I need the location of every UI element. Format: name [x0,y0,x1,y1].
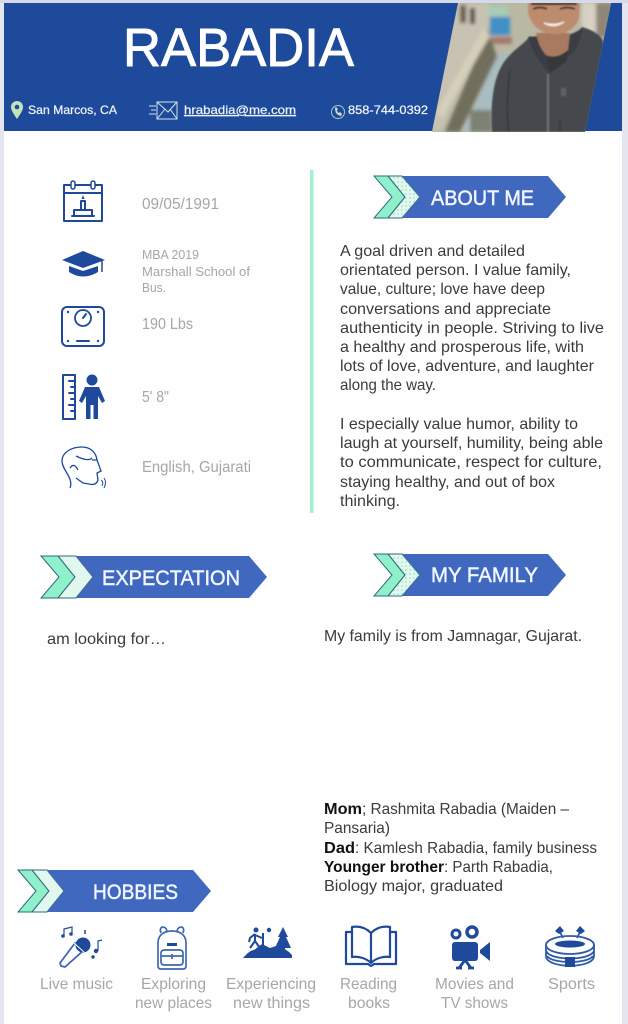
icon: backpack [158,927,186,969]
text block: about me: thinking. [340,493,400,510]
text block: about me: authenticity in people. Striving to live [340,320,604,337]
phone contact [332,103,428,118]
label: exploring new places: new places [135,995,212,1012]
text block: family members [324,801,597,895]
label: movies and tv shows [435,976,514,1012]
text block: about me: conversations and appreciate [340,301,551,318]
education [142,247,250,295]
heading: about me [374,176,566,218]
label: movies and tv shows: Movies and [435,976,514,993]
icon: movie camera [452,927,490,968]
label: reading books [340,976,397,1012]
label: reading books: books [348,995,390,1012]
education: Bus. [142,280,166,295]
text block: family members: ; Rashmita Rabadia (Maiden – [362,801,569,818]
heading: hobbies: HOBBIES [93,881,178,904]
text block: about me: a healthy and prosperous life, with [340,339,584,356]
personal details panel [62,181,251,488]
text block: about me: value, culture; love have deep [340,281,545,298]
text block: family members: Younger brother [324,859,444,876]
heading: hobbies [18,870,211,912]
icon: graduation cap [62,251,105,276]
divider line [310,170,314,513]
location contact [11,101,117,119]
label: reading books: Reading [340,976,397,993]
label: experiencing new things: new things [233,995,310,1012]
phone contact: 858-744-0392 [348,103,428,117]
education: Marshall School of [142,264,250,279]
label: live music: Live music [40,976,113,993]
text block: about me [340,243,604,510]
icon: speaking head [62,447,106,488]
icon: birthday calendar [64,181,102,221]
photo of Rabadia [432,3,611,132]
text block: about me: lots of love, adventure, and laughter [340,358,595,375]
label: exploring new places: Exploring [141,976,206,993]
label: exploring new places [135,976,212,1012]
text block: family members: Dad [324,840,355,857]
text block: about me: I especially value humor, ability to [340,416,578,433]
text block: family members: Biology major, graduated [324,878,503,895]
height: 5' 8" [142,389,169,406]
label: experiencing new things [226,976,316,1012]
text: family origin: My family is from Jamnagar, Gujarat. [324,628,582,645]
text block: family members: Pansaria) [324,820,390,837]
languages: English, Gujarati [142,459,251,476]
heading: expectation: EXPECTATION [102,567,240,590]
icon: hiker and tree [243,927,292,958]
icon: microphone [60,927,102,967]
heading: expectation [41,556,267,598]
text block: about me: along the way. [340,377,436,394]
heading: my family [374,554,566,596]
label: sports: Sports [548,976,595,993]
heading: my family: MY FAMILY [431,564,538,587]
email contact: hrabadia@me.com [184,103,296,117]
icon: weighing scale [62,307,104,346]
text block: about me: laugh at yourself, humility, being able [340,435,603,452]
text block: family members: : Parth Rabadia, [444,859,553,876]
text: expectation intro: am looking for… [47,631,166,648]
location contact: San Marcos, CA [28,103,117,117]
name title: RABADIA [123,18,354,78]
text block: about me: orientated person. I value family, [340,262,571,279]
text block: family members: Mom [324,801,362,818]
icon: ruler and person [63,374,105,419]
education: MBA 2019 [142,247,199,262]
icon: open book [346,927,396,966]
text block: family members: : Kamlesh Rabadia, family business [355,840,597,857]
hobbies row [40,926,595,1012]
weight: 190 Lbs [142,316,193,333]
header banner [4,0,622,135]
heading: about me: ABOUT ME [431,187,534,210]
birth date: 09/05/1991 [142,196,219,213]
text block: about me: staying healthy, and out of box [340,474,555,491]
label: movies and tv shows: TV shows [441,995,508,1012]
text block: about me: A goal driven and detailed [340,243,525,260]
icon: stadium [546,926,594,967]
label: experiencing new things: Experiencing [226,976,316,993]
email contact [149,102,296,119]
text block: about me: to communicate, respect for culture, [340,454,602,471]
